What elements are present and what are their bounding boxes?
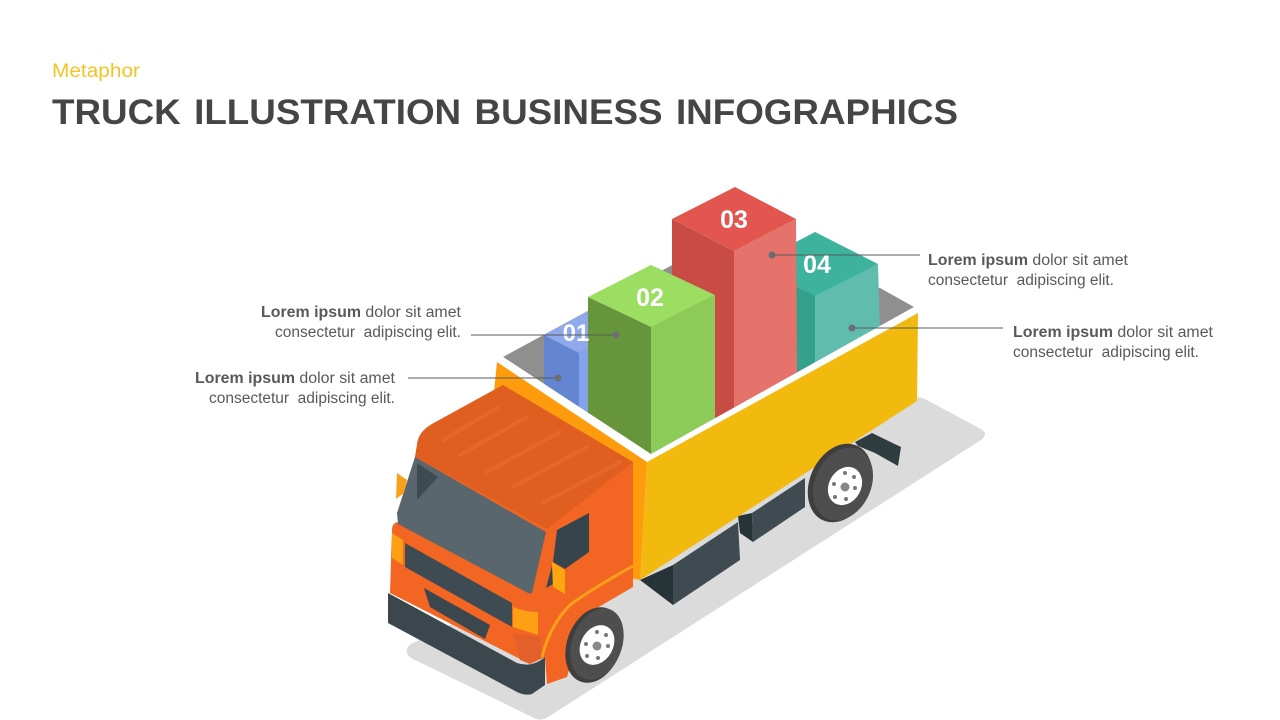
callout: left lower: consectetur adipiscing elit. [209, 390, 395, 407]
cab body [390, 385, 633, 684]
callout: left lower: Lorem ipsum dolor sit amet [195, 370, 396, 387]
grille [405, 543, 512, 627]
number 02: 02 [636, 284, 664, 312]
windshield visor [417, 463, 438, 500]
front wheel [555, 599, 633, 691]
white cargo rim [497, 307, 918, 463]
truck illustration [388, 187, 985, 720]
rear bumper [855, 433, 901, 466]
right mirror [552, 562, 565, 594]
window sliver [546, 566, 553, 588]
subtitle: Metaphor [52, 61, 141, 82]
number 04: 04 [803, 251, 831, 279]
left headlight [392, 533, 403, 565]
column 04 [796, 232, 880, 378]
ground shadow [406, 397, 985, 720]
title: TRUCK ILLUSTRATION BUSINESS INFOGRAPHICS [52, 93, 958, 132]
callout: right upper: consectetur adipiscing elit. [928, 272, 1114, 289]
callout: left upper [261, 304, 620, 341]
bumper [388, 593, 545, 695]
column 02 [588, 265, 715, 456]
column 03 [672, 187, 797, 420]
yellow cargo side [640, 313, 918, 580]
callout: left upper: consectetur adipiscing elit. [275, 324, 461, 341]
rear wheel [795, 433, 885, 533]
cab front darker patch [513, 633, 543, 664]
roof ribs [443, 408, 620, 503]
windshield [397, 457, 546, 594]
callout: right lower: consectetur adipiscing elit. [1013, 344, 1199, 361]
cab roof [415, 385, 633, 529]
fuel box front [640, 522, 740, 605]
column 01 [544, 310, 590, 415]
cargo floor [503, 250, 914, 454]
left mirror [396, 473, 407, 499]
curved stripe [542, 566, 633, 657]
callout: left lower [195, 370, 562, 407]
fuel box rear [738, 478, 805, 542]
side window [553, 513, 589, 569]
callout: right lower [848, 324, 1214, 361]
number 01: 01 [563, 320, 589, 347]
lower grille [424, 588, 490, 639]
cab back orange strip [494, 362, 647, 580]
callout: right upper [768, 252, 1129, 289]
right headlight [513, 607, 538, 635]
callout: right upper: Lorem ipsum dolor sit amet [928, 252, 1129, 269]
number 03: 03 [720, 206, 748, 234]
callout: left upper: Lorem ipsum dolor sit amet [261, 304, 462, 321]
callout: right lower: Lorem ipsum dolor sit amet [1013, 324, 1214, 341]
